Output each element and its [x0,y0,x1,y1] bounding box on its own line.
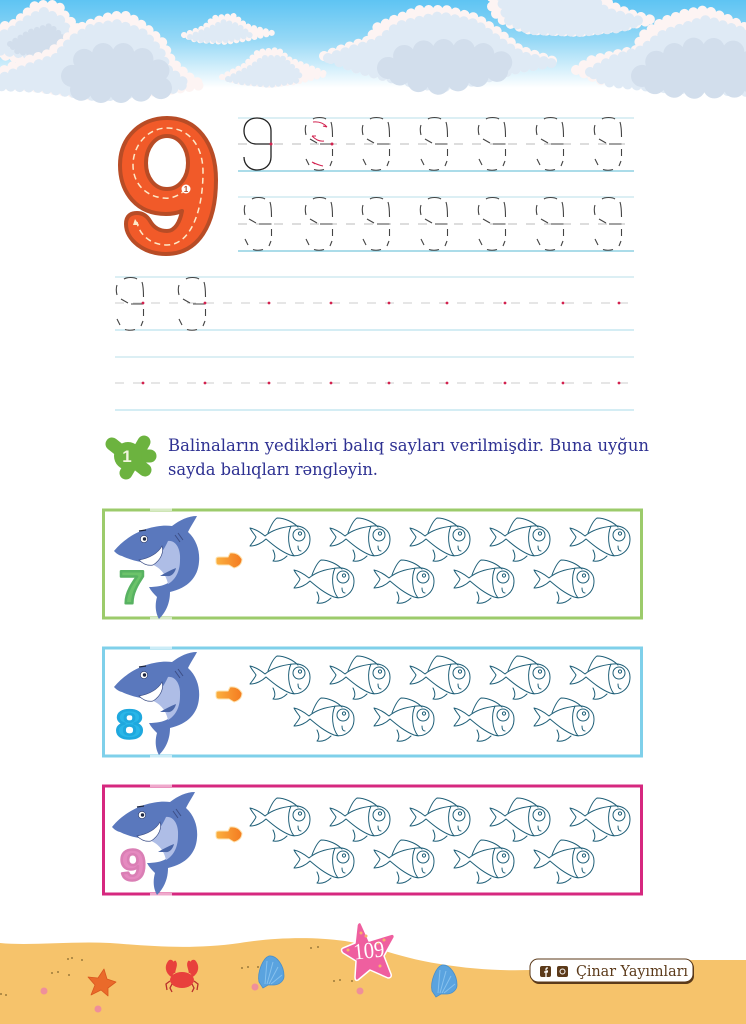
number 8: 8 [116,703,143,747]
fish group [250,518,630,603]
arrow [216,827,242,842]
panel: shark ate 9 fish [104,784,642,896]
panel: shark ate 8 fish [104,646,642,758]
icon: instagram [557,966,568,977]
cloud: top left back [0,5,84,60]
icon: blue shell [259,956,284,988]
icon: shark [112,792,197,895]
beach footprints and tiny shells [0,946,364,1012]
page number star [342,922,394,980]
icon: shark [114,516,199,619]
number 7: 7 [119,561,145,613]
writing lines row 1 [238,118,634,171]
cloud: large right [576,10,746,92]
icon: crab [166,961,198,992]
icon: puzzle piece number 1 [112,442,150,473]
icon: facebook [540,966,551,977]
icon: blue shell right [432,965,457,997]
cloud: top right back [492,0,652,32]
big number 9: 1 [184,185,189,194]
big number 9 [120,118,216,254]
publisher badge: Çinar Yayımları [576,962,688,980]
cloud: small lower [222,50,326,85]
fish group [250,656,630,741]
page number star: 109 [352,936,386,965]
instruction text: Balinaların yedikləri balıq sayları verilmişdir. Buna uyğun [168,436,649,455]
icon: shark [114,652,199,755]
cloud: large left [0,16,202,97]
cloud: small upper [184,16,272,42]
clouds [0,0,746,97]
writing lines row 4 [115,357,634,410]
arrow [216,553,242,568]
dashed 9 with red arrows [305,118,332,170]
publisher badge [530,959,694,984]
sky background [0,0,746,88]
icon: puzzle piece number 1: 1 [122,447,132,466]
fish group [250,798,630,883]
number 9: 9 [120,841,146,890]
cloud: large center [324,10,556,88]
instruction text [168,436,649,479]
panel: shark ate 7 fish [104,508,642,620]
writing lines row 2 [238,197,634,251]
solid model 9 [244,118,271,170]
sand [0,938,746,1024]
icon: orange starfish [88,969,116,996]
writing lines row 3 [115,277,634,330]
instruction text: sayda balıqları rəngləyin. [168,460,378,479]
arrow [216,687,242,702]
